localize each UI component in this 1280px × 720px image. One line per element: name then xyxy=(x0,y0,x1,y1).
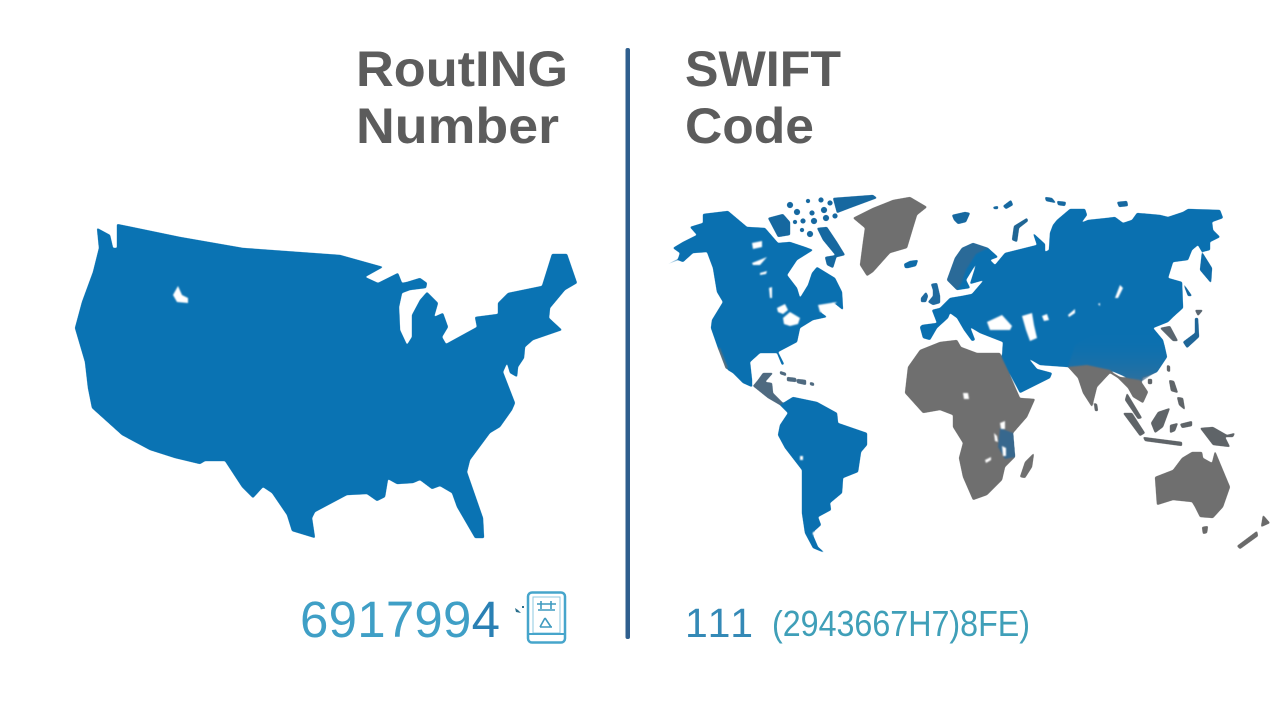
signal marks xyxy=(515,606,524,613)
heading: Routing Number: RoutING xyxy=(356,41,568,97)
map: world xyxy=(657,195,1270,553)
South America xyxy=(778,397,867,553)
northern islands xyxy=(952,197,1128,224)
Novaya Zemlya xyxy=(1012,218,1028,242)
inland seas xyxy=(987,285,1123,341)
Japan xyxy=(1183,318,1199,348)
Korea xyxy=(1160,326,1178,341)
SWIFT code value: (2943667H7)8FE) xyxy=(772,603,1030,644)
center divider xyxy=(626,48,630,639)
India and Southeast Asia xyxy=(1068,365,1148,407)
Sri Lanka, Malaya, Indonesia and Philippines xyxy=(1094,365,1235,447)
Baja California xyxy=(718,348,728,369)
routing number value: 6917994 xyxy=(300,591,500,648)
South China shading xyxy=(1068,330,1167,383)
icon: mobile phone xyxy=(515,592,565,642)
Sakhalin xyxy=(1183,283,1192,296)
heading: SWIFT Code: SWIFT xyxy=(685,41,841,97)
heading: SWIFT Code xyxy=(685,41,841,154)
Scandinavia shading xyxy=(947,243,988,290)
Iceland xyxy=(904,260,918,268)
Australia xyxy=(1155,451,1230,518)
Kamchatka xyxy=(1200,252,1212,283)
heading: Routing Number: Number xyxy=(356,98,559,154)
African lakes xyxy=(963,393,1006,463)
Africa xyxy=(905,340,1035,500)
East Africa shading xyxy=(998,428,1015,459)
British Isles xyxy=(921,283,940,305)
Caribbean xyxy=(780,371,814,386)
Central America xyxy=(753,373,783,405)
Tasmania and New Zealand xyxy=(1202,515,1270,549)
map: United States xyxy=(75,224,577,538)
heading: SWIFT Code: Code xyxy=(685,98,814,154)
Arctic islands xyxy=(768,195,877,268)
Greenland xyxy=(853,197,927,276)
SWIFT code prefix: 111 xyxy=(685,600,753,646)
Canadian lakes xyxy=(752,241,837,326)
Madagascar xyxy=(1020,453,1034,478)
lake in Montana region xyxy=(173,286,188,303)
North America xyxy=(657,211,843,387)
heading: Routing Number xyxy=(356,41,568,154)
Eurasia xyxy=(920,209,1223,393)
